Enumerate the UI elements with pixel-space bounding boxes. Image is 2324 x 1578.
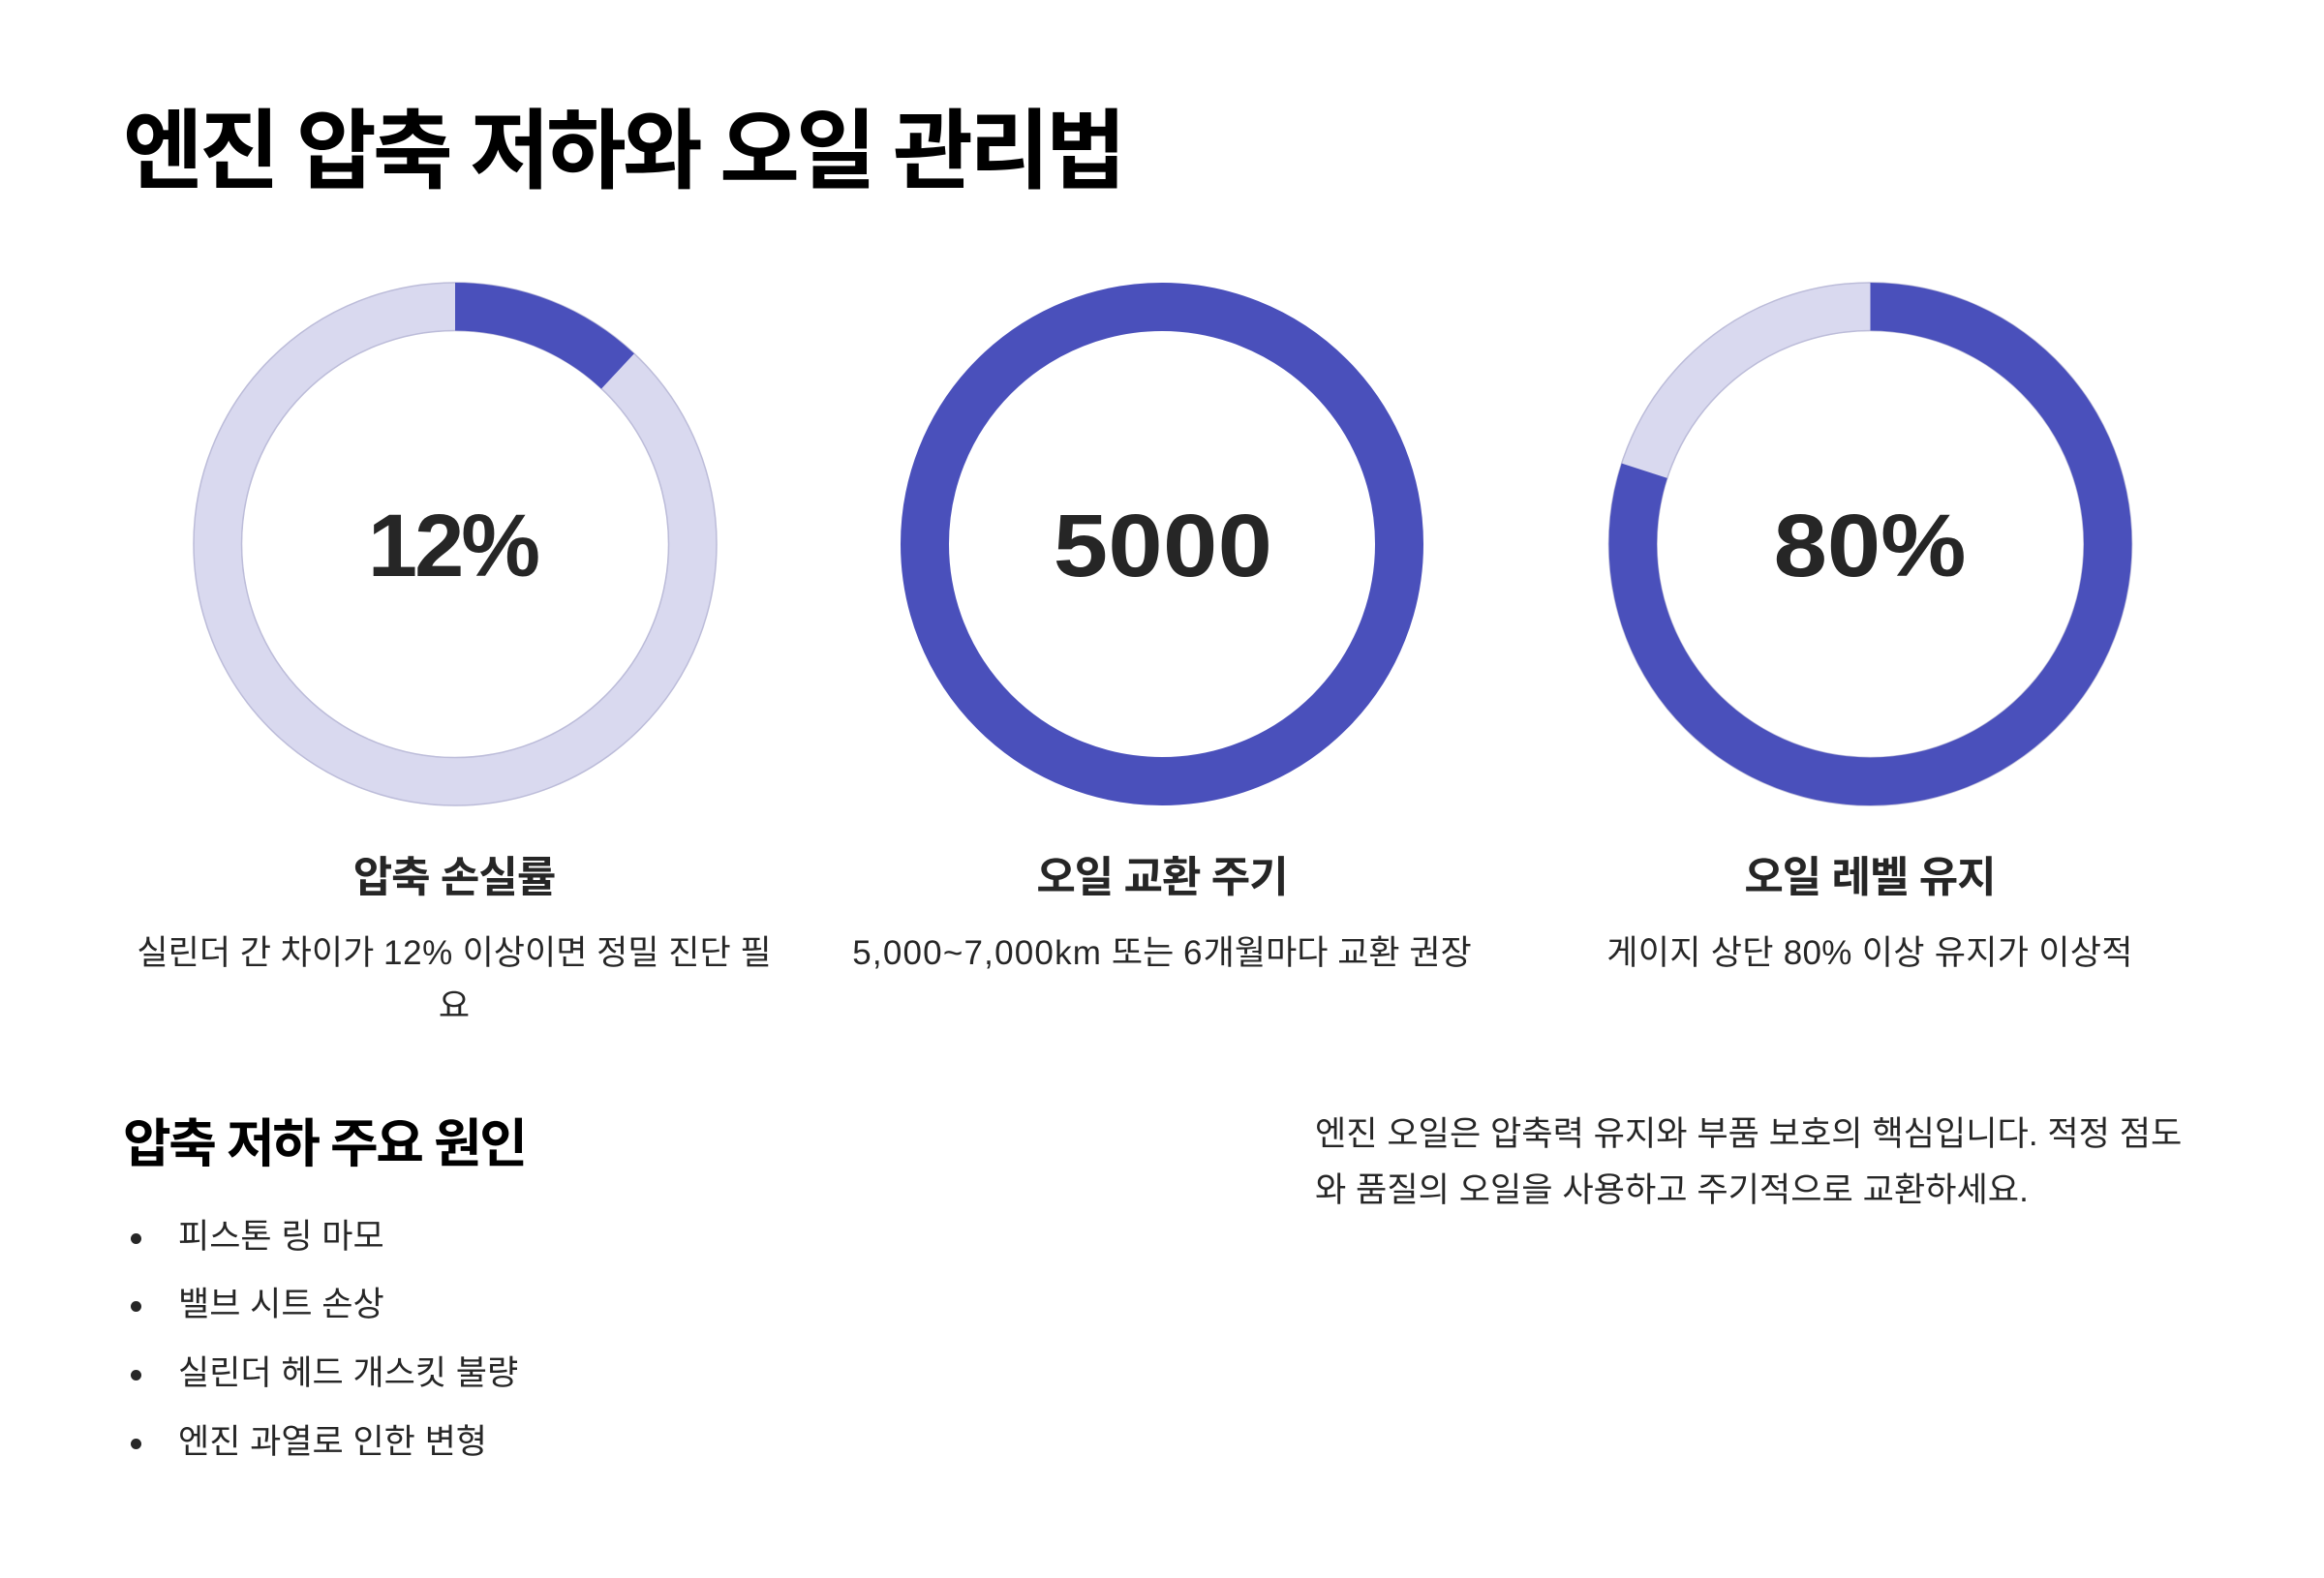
value: 12% xyxy=(368,497,537,595)
donut chart: 5000 xyxy=(901,283,1423,805)
label: 압축 손실률 xyxy=(353,854,555,901)
value: 80% xyxy=(1774,497,1966,595)
value: 5000 xyxy=(1054,497,1272,595)
description: 5,000~7,000km 또는 6개월마다 교환 권장 xyxy=(852,934,1472,972)
list item: 밸브 시트 손상 xyxy=(178,1286,384,1323)
panel: compression loss xyxy=(137,282,772,1025)
label: 오일 레벨 유지 xyxy=(1744,854,1996,901)
description xyxy=(137,934,772,1025)
list item: 엔진 과열로 인한 변형 xyxy=(178,1423,487,1461)
description: 실린더 간 차이가 12% 이상이면 정밀 진단 필 xyxy=(137,934,772,972)
list item: 실린더 헤드 개스킷 불량 xyxy=(178,1354,518,1392)
title: 엔진 압축 저하와 오일 관리법 xyxy=(123,104,1122,200)
panel: oil level xyxy=(1606,282,2133,972)
panel: oil change interval xyxy=(852,283,1472,972)
description: 게이지 상단 80% 이상 유지가 이상적 xyxy=(1606,934,2133,972)
label: 오일 교환 주기 xyxy=(1036,854,1288,901)
text block: oil summary: 와 품질의 오일을 사용하고 주기적으로 교환하세요. xyxy=(1315,1171,2029,1209)
list item: 피스톤 링 마모 xyxy=(178,1218,384,1256)
section heading: main causes: 압축 저하 주요 원인 xyxy=(123,1115,525,1173)
donut chart: 12% xyxy=(193,282,718,806)
text block: oil summary: 엔진 오일은 압축력 유지와 부품 보호의 핵심입니다. 적정 점도 xyxy=(1315,1115,2182,1153)
list: causes xyxy=(131,1218,518,1461)
donut chart: 80% xyxy=(1607,282,2132,806)
description: 요 xyxy=(439,987,470,1025)
text block: oil summary xyxy=(1315,1115,2182,1209)
